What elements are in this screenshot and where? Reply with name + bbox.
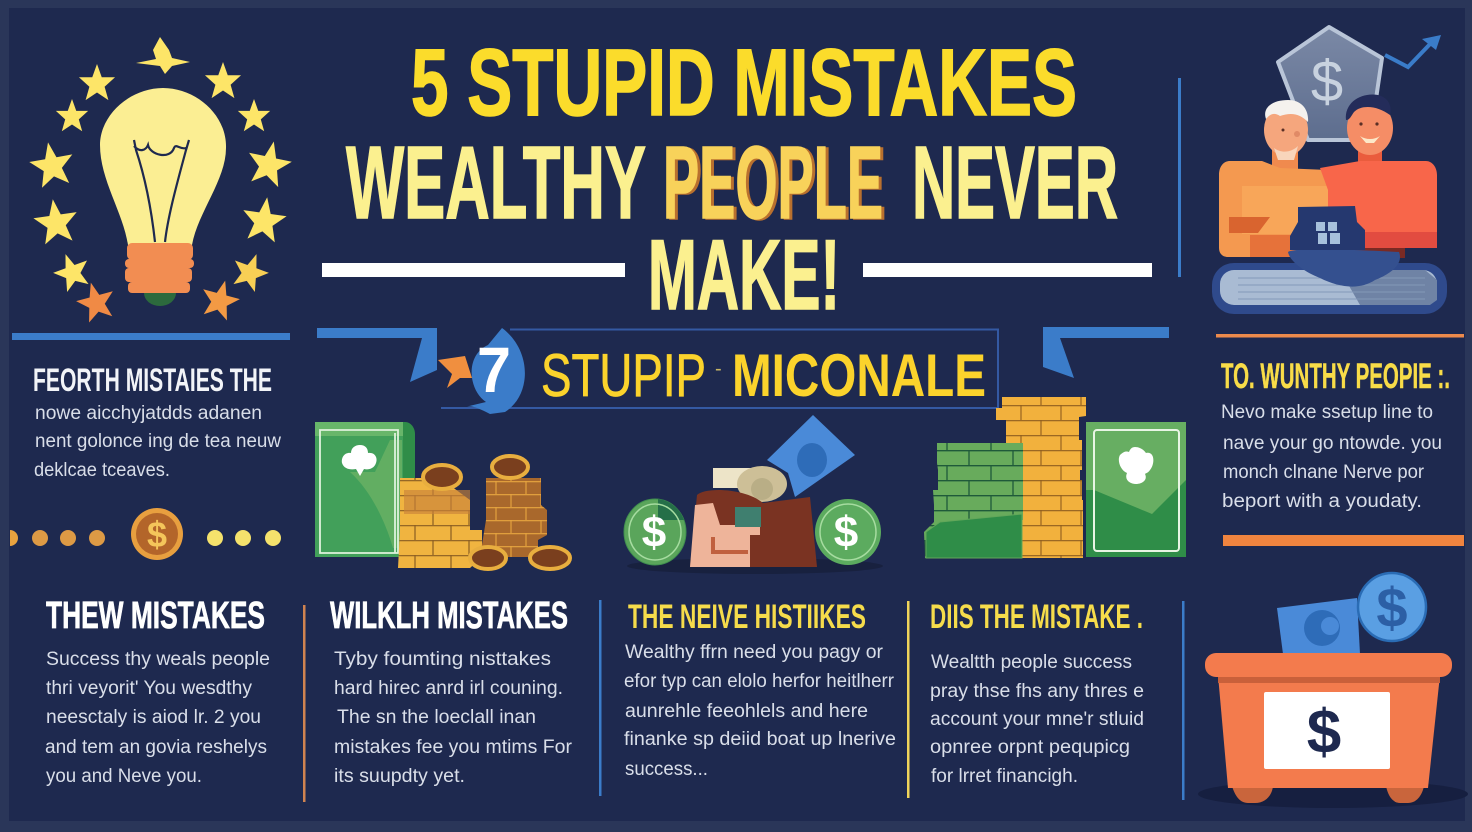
blue coin: $ bbox=[1376, 576, 1408, 639]
title line 2: PEOPLE bbox=[663, 125, 883, 240]
right intro body: nave your go ntowde. you bbox=[1223, 433, 1442, 454]
filament bbox=[134, 140, 189, 242]
column 1 body: you and Neve you. bbox=[46, 766, 202, 787]
left person bbox=[1219, 100, 1348, 257]
dollar coin right bbox=[815, 499, 881, 565]
column 4 body: for lrret financigh. bbox=[931, 766, 1078, 787]
column 2 body bbox=[334, 649, 573, 787]
illustration: two wealthy people bbox=[1212, 27, 1447, 314]
column 3 body: aunrehle feeohlels and here bbox=[625, 701, 868, 722]
column 2 body: hard hirec anrd irl couning. bbox=[334, 678, 563, 699]
column 2: mistake text bbox=[330, 595, 573, 787]
title rule left bbox=[322, 263, 625, 277]
growth arrow bbox=[1385, 35, 1441, 67]
column 3 body: finanke sp deiid boat up lnerive bbox=[624, 729, 896, 750]
gold brick stack bbox=[398, 478, 482, 568]
column 3 body: Wealthy ffrn need you pagy or bbox=[625, 642, 884, 663]
wallet body bbox=[690, 490, 817, 567]
title line 2: PEOPLE bbox=[666, 126, 886, 241]
column 1: mistake text bbox=[45, 595, 270, 787]
text block: right intro bbox=[1221, 357, 1450, 512]
text block: left intro bbox=[33, 362, 281, 481]
column 1 body: Success thy weals people bbox=[46, 649, 270, 670]
gold coins bbox=[423, 456, 570, 569]
column 3 body: success... bbox=[625, 759, 708, 780]
green card bbox=[1086, 422, 1186, 557]
left intro body: nent golonce ing de tea neuw bbox=[35, 431, 281, 452]
paper and shell bbox=[713, 468, 755, 488]
box label bbox=[1264, 692, 1390, 769]
green wallet bbox=[926, 514, 1022, 558]
stars ring bbox=[26, 37, 295, 324]
title line 2: NEVER bbox=[912, 125, 1118, 240]
right intro body bbox=[1221, 402, 1442, 512]
box shadow bbox=[1198, 780, 1468, 808]
illustration: savings box with money bbox=[1198, 573, 1468, 808]
vertical rule top right bbox=[1178, 78, 1181, 277]
banner left bracket bbox=[317, 328, 437, 382]
shield with dollar: $ bbox=[1311, 49, 1343, 114]
illustration: wallet with dollars bbox=[624, 415, 883, 574]
banner bbox=[317, 327, 1169, 414]
banner title bbox=[541, 342, 986, 409]
navy bag with window bbox=[1290, 206, 1365, 250]
bulb green tip bbox=[144, 280, 176, 306]
number 7: 7 bbox=[477, 334, 511, 406]
dollar coin left bbox=[624, 499, 686, 565]
icon: dollar coin bbox=[131, 508, 183, 560]
illustration: cash card and gold stacks bbox=[315, 422, 570, 569]
left intro body bbox=[34, 403, 281, 481]
column 1 body: neesctaly is aiod lr. 2 you bbox=[46, 707, 261, 728]
brown brick stack bbox=[480, 478, 547, 557]
green stack bbox=[924, 443, 1023, 558]
column 2 body: Tyby foumting nisttakes bbox=[334, 649, 551, 670]
banner badge bbox=[465, 328, 525, 414]
yellow dots bbox=[207, 530, 281, 546]
left intro heading: FEORTH MISTAIES THE bbox=[33, 362, 272, 398]
column 2 heading: WILKLH MISTAKES bbox=[330, 595, 568, 637]
orange rule right bbox=[1216, 334, 1464, 338]
title rule right bbox=[863, 263, 1152, 277]
column 3 heading: THE NEIVE HISTIIKES bbox=[628, 598, 866, 636]
icon: dollar coin: $ bbox=[147, 514, 167, 555]
column 2 body: its suupdty yet. bbox=[334, 766, 465, 787]
dot divider with coin bbox=[10, 508, 281, 560]
title line 2 bbox=[346, 125, 1118, 241]
blue rule left bbox=[12, 333, 290, 340]
column 4 body bbox=[930, 652, 1144, 787]
column 1 heading: THEW MISTAKES bbox=[46, 595, 265, 637]
column 4 heading: DIIS THE MISTAKE . bbox=[930, 598, 1143, 636]
column 1 body bbox=[45, 649, 270, 787]
banner frame bbox=[441, 330, 998, 408]
right intro body: beport with a youdaty. bbox=[1222, 491, 1422, 512]
column 1 body: thri veyorit' You wesdthy bbox=[46, 678, 252, 699]
ground shadow bbox=[627, 558, 883, 574]
column 1 body: and tem an govia reshelys bbox=[45, 737, 267, 758]
right intro body: Nevo make ssetup line to bbox=[1221, 402, 1433, 423]
banner title: - bbox=[715, 358, 722, 380]
icon: light bulb with stars bbox=[26, 37, 295, 324]
dollar coin right: $ bbox=[834, 508, 858, 557]
wallet inner card bbox=[735, 507, 761, 527]
blue bill bbox=[767, 415, 855, 497]
book bbox=[1212, 263, 1447, 314]
column 4 body: account your mne'r stluid bbox=[930, 709, 1144, 730]
column 3: mistake text bbox=[624, 598, 896, 780]
banner title: MICONALE bbox=[732, 342, 986, 409]
title line 1: 5 STUPID MISTAKES bbox=[411, 30, 1077, 136]
box rim bbox=[1205, 653, 1452, 677]
column 2 body: mistakes fee you mtims For bbox=[334, 737, 573, 758]
column 4 body: opnree orpnt pequpicg bbox=[930, 737, 1130, 758]
gold stack bbox=[996, 397, 1086, 558]
title line 3: MAKE! bbox=[648, 219, 840, 330]
column 2 body: The sn the loeclall inan bbox=[337, 707, 536, 728]
navy cloth bbox=[1288, 249, 1400, 287]
left intro body: deklcae tceaves. bbox=[34, 460, 170, 481]
orange bar right bbox=[1223, 535, 1464, 546]
right person bbox=[1320, 94, 1437, 258]
bulb glass bbox=[100, 88, 226, 245]
right intro body: monch clnane Nerve por bbox=[1223, 462, 1425, 483]
orange star bbox=[438, 356, 472, 388]
illustration: green and gold stacks with card bbox=[924, 397, 1186, 558]
box feet bbox=[1232, 786, 1424, 803]
column 4: mistake text bbox=[930, 598, 1144, 787]
box label: $ bbox=[1307, 698, 1341, 767]
left intro body: nowe aicchyjatdds adanen bbox=[35, 403, 262, 424]
shield with dollar bbox=[1278, 27, 1382, 140]
dollar coin left: $ bbox=[642, 508, 666, 557]
column 3 body: efor typ can elolo herfor heitlherr bbox=[624, 671, 895, 692]
blue bill bbox=[1277, 598, 1360, 654]
column 3 body bbox=[624, 642, 896, 780]
box body bbox=[1218, 675, 1440, 788]
column 4 body: Wealtth people success bbox=[931, 652, 1132, 673]
banner title: STUPIP bbox=[541, 342, 706, 409]
title line 2: WEALTHY bbox=[346, 125, 646, 240]
title bbox=[322, 30, 1152, 330]
column 4 body: pray thse fhs any thres e bbox=[930, 681, 1144, 702]
banner right bracket bbox=[1043, 327, 1169, 378]
bulb base bbox=[125, 243, 194, 293]
green card bbox=[315, 422, 415, 557]
orange dots bbox=[10, 530, 105, 546]
blue coin bbox=[1358, 573, 1426, 641]
